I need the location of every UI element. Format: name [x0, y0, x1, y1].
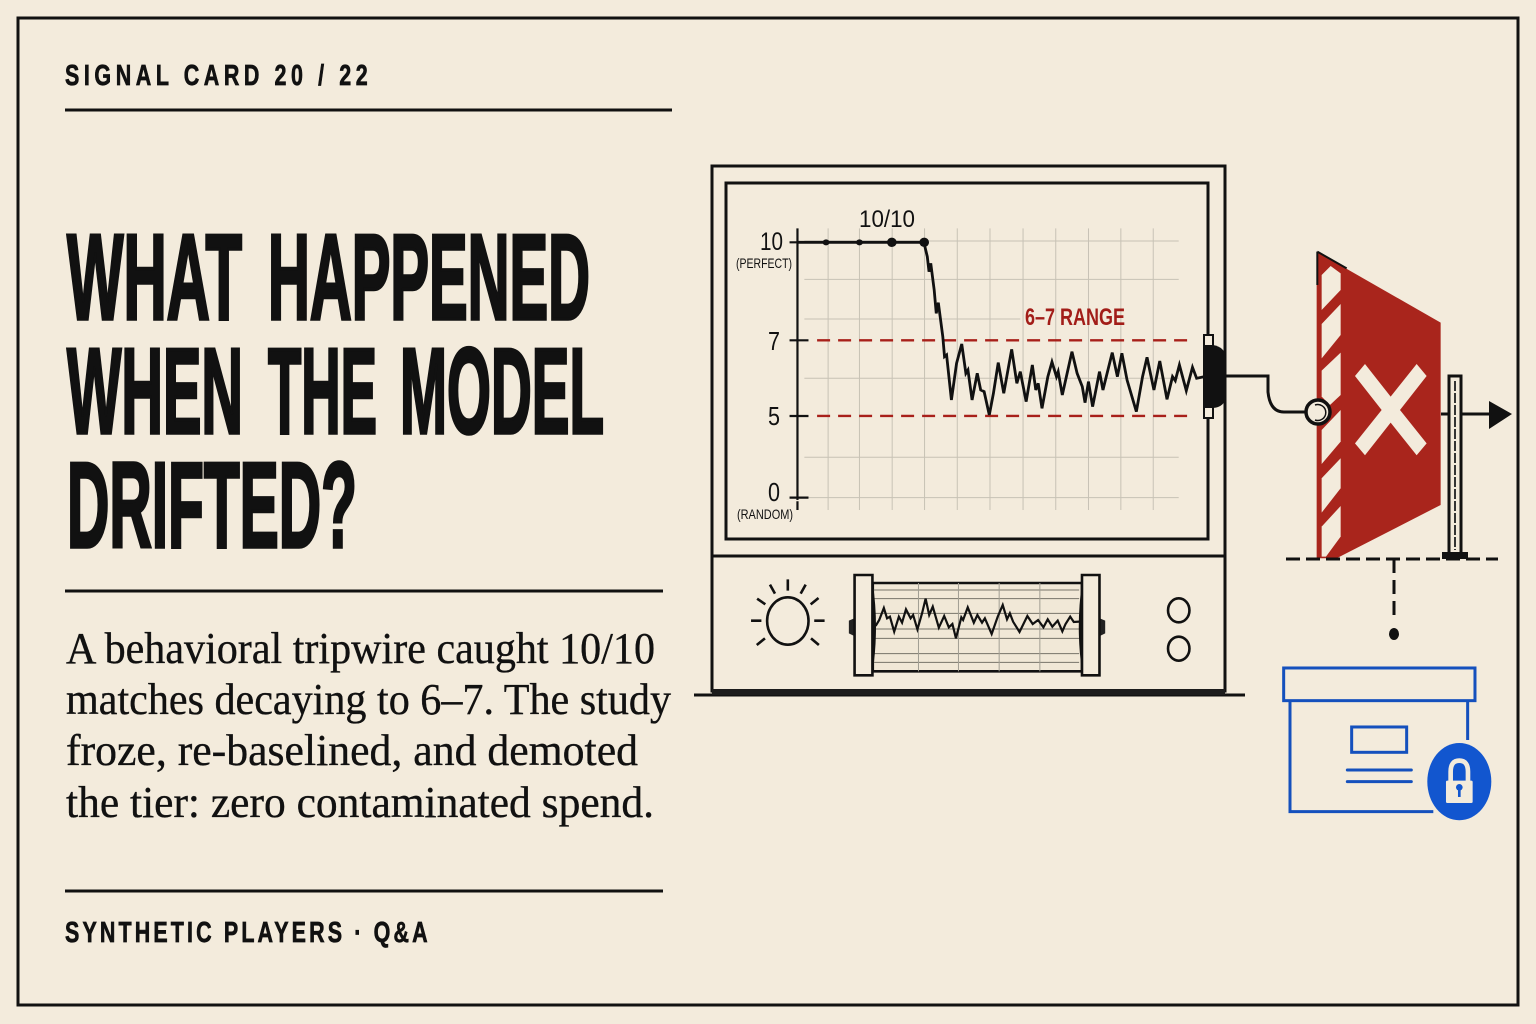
score line [797, 242, 1205, 415]
perfect-score dots [823, 238, 929, 247]
screen connector [1203, 335, 1226, 418]
axis and ticks [790, 228, 808, 510]
red range lines [817, 340, 1194, 416]
chart: model score decay [790, 228, 1205, 510]
title: WHAT [67, 209, 242, 345]
chart labels: 7 [768, 326, 780, 356]
icon: padlock badge [1427, 743, 1491, 820]
chart labels: 10 [760, 228, 783, 256]
title [67, 209, 604, 573]
red gate with X [1317, 252, 1441, 558]
title: THE [268, 323, 377, 459]
archive box with lock [1284, 668, 1491, 820]
body text [66, 624, 671, 827]
indicator knobs [1168, 598, 1189, 661]
body text: A behavioral tripwire caught 10/10 [66, 624, 655, 673]
chart labels: 10/10 [859, 206, 915, 233]
body text: matches decaying to 6–7. The study [66, 675, 671, 724]
chart labels [736, 206, 915, 522]
paper roll recorder [849, 575, 1105, 675]
text: MODEL [400, 323, 604, 459]
post and exit arrow [1441, 376, 1512, 559]
hazard stripes [1322, 266, 1341, 557]
control panel [751, 575, 1189, 675]
icon: sun dial [751, 579, 825, 645]
eyebrow: signal card number: SIGNAL CARD 20 / 22 [65, 60, 368, 92]
chart grid [804, 228, 1179, 510]
monitor housing [694, 166, 1245, 695]
gate sensor ring [1306, 400, 1330, 424]
footer label: SYNTHETIC PLAYERS · Q&A [65, 917, 428, 949]
title: DRIFTED? [67, 437, 357, 573]
title: WHEN [67, 323, 243, 459]
chart labels: 5 [768, 401, 780, 431]
dashed ground line and drop to archive [1286, 559, 1498, 640]
chart labels: (PERFECT) [736, 255, 792, 271]
chart labels: (RANDOM) [737, 506, 793, 522]
text: HAPPENED [268, 209, 590, 345]
chart labels: 0 [768, 477, 780, 507]
range label: 6–7 RANGE [1025, 304, 1125, 331]
body text: the tier: zero contaminated spend. [66, 778, 654, 827]
X mark [1355, 364, 1427, 455]
body text: froze, re-baselined, and demoted [66, 726, 638, 775]
cable to gate [1226, 376, 1308, 412]
